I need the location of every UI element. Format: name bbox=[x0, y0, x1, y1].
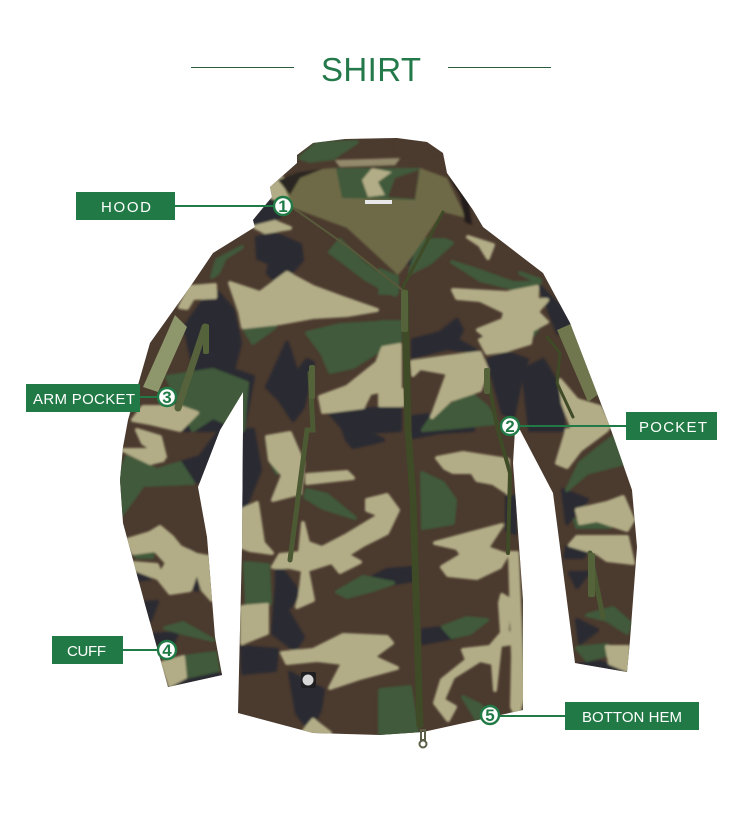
callout: hood bbox=[76, 192, 292, 220]
jacket illustration bbox=[110, 130, 650, 750]
logo badge bbox=[301, 672, 316, 688]
callout: bottom hem bbox=[481, 702, 699, 730]
callout: cuff: CUFF bbox=[67, 643, 106, 660]
callout: arm pocket: ARM POCKET bbox=[33, 391, 135, 408]
green camouflage patches bbox=[120, 142, 630, 735]
zipper pulls bbox=[203, 290, 595, 597]
callout: arm pocket bbox=[26, 384, 176, 412]
callout: pocket bbox=[501, 412, 717, 440]
bottom zipper pull bbox=[420, 730, 426, 748]
collar tag bbox=[365, 200, 392, 204]
hood band bbox=[302, 159, 446, 172]
inner fleece lining bbox=[282, 168, 466, 275]
hood lining shadows bbox=[278, 168, 322, 195]
callout: hood: 1 bbox=[278, 197, 288, 216]
dark camouflage patches bbox=[133, 197, 627, 730]
title: SHIRT: SHIRT bbox=[321, 51, 421, 88]
arm patch left bbox=[143, 315, 187, 392]
callout: bottom hem: 5 bbox=[485, 706, 495, 725]
callout: cuff: 4 bbox=[162, 641, 172, 660]
callout: bottom hem: BOTTON HEM bbox=[582, 709, 682, 726]
inner collar camouflage bbox=[336, 168, 420, 200]
tan camouflage patches bbox=[123, 178, 633, 733]
callout: pocket: POCKET bbox=[639, 419, 707, 436]
callout: arm pocket: 3 bbox=[162, 388, 172, 407]
callout: cuff bbox=[52, 636, 176, 664]
callout: pocket: 2 bbox=[505, 417, 515, 436]
arm patch right bbox=[557, 323, 600, 402]
zippers bbox=[178, 208, 603, 725]
callout: hood: HOOD bbox=[101, 199, 151, 216]
